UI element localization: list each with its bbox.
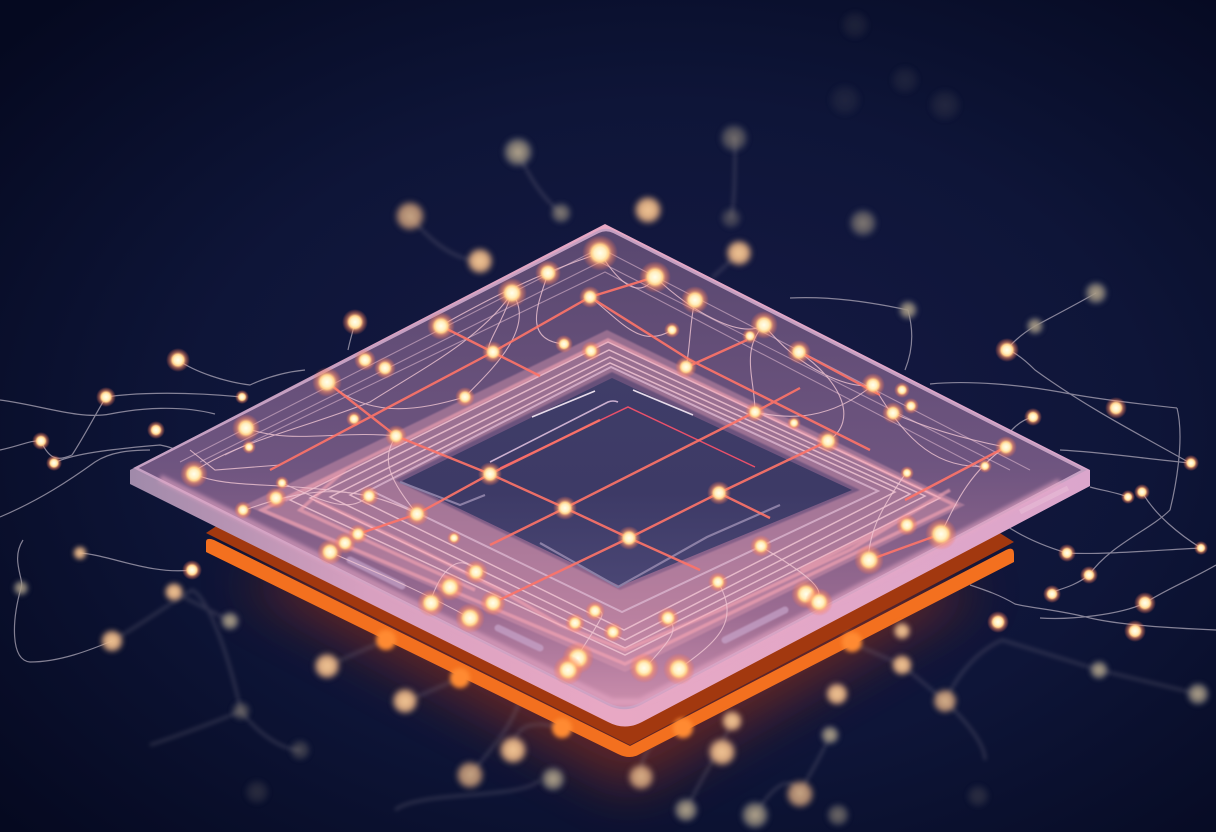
thin red die traces (500, 407, 755, 468)
glowing nodes on the chip and wires (32, 235, 1208, 685)
connection wires outside the chip (0, 293, 1216, 662)
slot marks on plate (350, 560, 785, 648)
soft distant wires (112, 138, 1198, 815)
concentric traces (290, 342, 940, 655)
red glowing traces (270, 277, 1006, 603)
centre die (402, 378, 852, 586)
internal wires (190, 253, 1005, 668)
centre die outlines (400, 390, 780, 587)
front glowing traces (262, 340, 955, 664)
plate edge (130, 224, 1090, 726)
plate top surface (136, 230, 1084, 708)
orange base layer (206, 470, 1014, 757)
orange under-glow (240, 500, 980, 790)
translucent chip plate (130, 224, 1090, 726)
upper trace fan near the rim (180, 248, 1030, 470)
outer rim glow near the front (160, 478, 1060, 702)
trace ring band (245, 330, 965, 672)
